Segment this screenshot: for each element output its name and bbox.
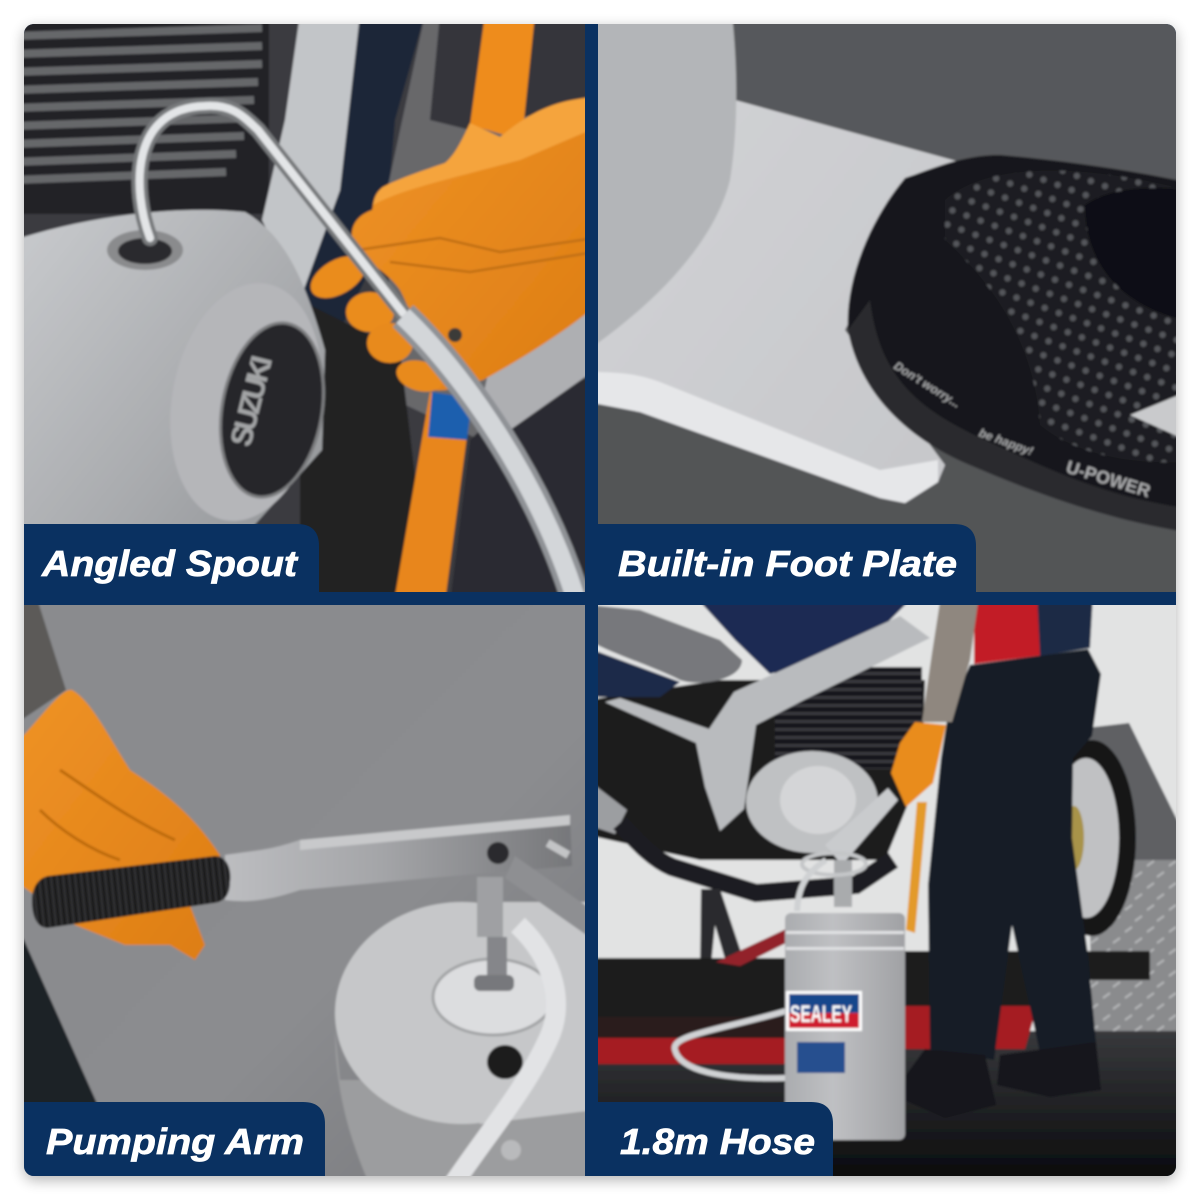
sole text: Don't worry... [891,359,963,411]
floor [588,1031,1186,1186]
orange gloved hand [304,97,595,397]
tank flange [433,959,553,1035]
label tab: Built-in Foot Plate: Built-in Foot Plate [618,543,957,584]
silver muffler [588,780,627,834]
black shoe [848,155,1186,532]
pump bracket strap [505,856,595,941]
instruction label [797,1042,845,1073]
panel: foot plate photo [588,14,1186,602]
checker ramp [1086,723,1186,1031]
clear hose loop [675,1011,786,1078]
engine fins [775,667,922,769]
exhaust pipe [620,823,893,893]
sealey logo: SEALEY [790,1001,852,1028]
tank bolt [501,1140,521,1160]
label tab: Built-in Foot Plate [598,524,976,592]
bolt heads [487,840,570,864]
orange strap upper [470,14,535,140]
label tab: Angled Spout: Angled Spout [41,543,299,584]
silver pump arm [225,815,572,901]
little finger [394,358,436,394]
orange pump pole [906,802,927,933]
orange glove [891,722,946,807]
black rubber grip [32,856,230,928]
suzuki badge [218,320,327,500]
clear braided hose [403,316,578,606]
panel: pumping arm photo [14,595,595,1186]
hose up to pump head [797,860,826,911]
divider vertical [585,24,598,1176]
tank filler hole [487,1045,523,1079]
motorcycle dark interior [588,680,925,860]
divider horizontal [24,592,1176,605]
pump handle arm [825,788,898,865]
silver tank [335,902,595,1186]
label tab: 1.8m Hose: 1.8m Hose [620,1121,815,1162]
engine cover [24,208,327,524]
silver frame [605,616,930,831]
orange strap lower [394,392,472,602]
tank side [598,24,738,344]
orange glove hand [14,690,220,960]
white foot plate [598,99,956,482]
silver oil drainer tank [785,913,905,1140]
pump head ring [802,853,866,875]
motorcycle lift [588,929,1150,1064]
blue tag [428,392,472,440]
shoes [904,1042,1101,1118]
ring finger [367,323,413,363]
rear wheel [1048,740,1136,936]
motorcycle seat and tank [588,595,915,697]
middle finger [346,292,394,332]
label tab: Pumping Arm: Pumping Arm [46,1121,304,1162]
chrome spout [140,106,403,313]
label tab: 1.8m Hose [598,1102,833,1176]
engine oil filler hole [107,230,183,270]
shoe sole band [848,300,1186,532]
label tab: Pumping Arm [24,1102,325,1176]
glove cuff [373,97,595,205]
shoe tongue [1085,187,1176,318]
plate lip highlight [588,372,938,503]
upper floor [732,14,1186,190]
pump column [474,877,514,991]
engine cooling fins [14,14,269,214]
shirt navy [1037,595,1093,656]
round clutch cover [171,285,318,522]
white shoe logo [1128,394,1176,438]
clear hose [452,925,556,1186]
person trousers [928,649,1101,1060]
shoe perforated mesh [945,171,1186,462]
sole brand: U-POWER [1064,457,1153,501]
panel: 1.8m hose photo [588,595,1186,1186]
pump column [834,860,852,907]
frame tube and dark wheel area [262,14,595,602]
engine casing [746,751,878,853]
kick stand [700,889,749,976]
hose clamp [448,328,462,342]
sole text happy: be happy! [977,426,1035,458]
person red shirt [974,595,1044,664]
panel: angled spout photo [14,14,595,606]
dark trouser [24,938,98,1102]
label tab: Angled Spout [24,524,319,592]
tattooed arm [24,605,66,719]
sealey logo [786,991,862,1031]
suzuki badge: SUZUKI [225,352,279,450]
finger creases [358,238,595,272]
tattooed forearm [922,595,979,722]
index finger [308,254,364,300]
